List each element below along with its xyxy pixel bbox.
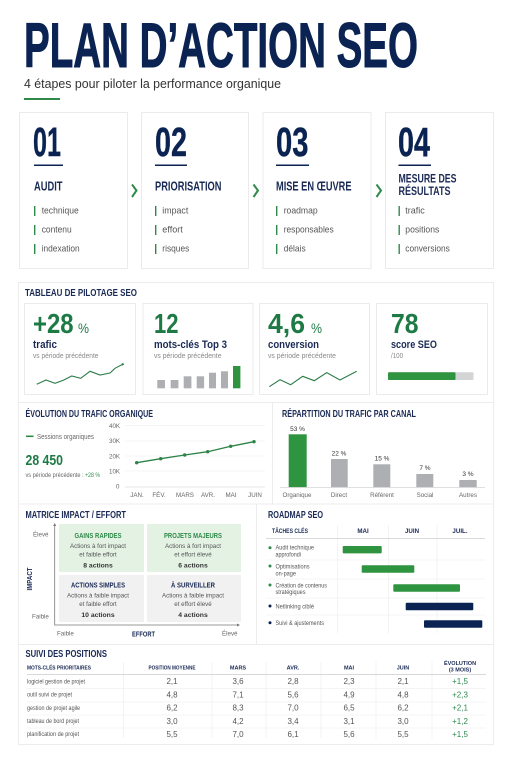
panel: step 03 mise en oeuvre: MISE EN ŒUVRE xyxy=(276,180,352,194)
panel: step 04 mesure des resultats: trafic xyxy=(405,206,425,217)
table row: outil suivi de projet: +2,3 xyxy=(452,690,468,700)
KPI: trafic: vs période précédente xyxy=(33,353,99,360)
table row: logiciel gestion de projet: logiciel gestion de projet xyxy=(27,678,85,686)
KPI: conversion: 4,6 xyxy=(268,308,305,339)
table row: outil suivi de projet: 4,8 xyxy=(166,690,178,700)
matrix axes: Faible xyxy=(57,630,74,638)
quadrant: a surveiller xyxy=(147,575,241,622)
table row: gestion de projet agile: 6,2 xyxy=(166,704,178,712)
table row: outil suivi de projet: outil suivi de projet xyxy=(27,692,72,698)
KPI: mots-cles top 3: vs période précédente xyxy=(154,353,222,360)
table row: planification de projet: 5,6 xyxy=(343,730,355,739)
panel: step 04 mesure des resultats: 04 xyxy=(398,119,430,165)
panel: step 01 audit: 01 xyxy=(33,119,61,165)
arrow: step 2 to 3 xyxy=(254,184,258,197)
bar chart: canaux: Organique xyxy=(283,492,312,499)
quadrant: gains rapides: GAINS RAPIDES xyxy=(74,531,122,540)
line chart: JUIN xyxy=(248,492,262,499)
panel: repartition du trafic par canal xyxy=(272,402,494,504)
table row: tableau de bord projet: 3,1 xyxy=(343,717,355,726)
table row: gestion de projet agile: gestion de projet agile xyxy=(27,705,80,712)
table row: logiciel gestion de projet: +1,5 xyxy=(452,677,468,686)
panel: step 02 priorisation: effort xyxy=(162,225,183,236)
table header: JUIN xyxy=(397,666,409,672)
table row: outil suivi de projet: 4,8 xyxy=(397,690,409,700)
task: optimisations on-page: on-page xyxy=(276,570,296,578)
KPI: mots-cles top 3: mots-clés Top 3 xyxy=(154,339,227,351)
panel: step 01 audit: indexation xyxy=(42,244,80,255)
quadrant: gains rapides: 8 actions xyxy=(83,562,113,570)
line chart: JAN. xyxy=(130,492,144,499)
KPI: trafic: +28 xyxy=(33,308,74,339)
table header: MOTS-CLÉS PRIORITAIRES xyxy=(27,664,91,672)
panel: roadmap SEO xyxy=(256,504,494,644)
table row: gestion de projet agile: 8,3 xyxy=(232,704,244,712)
table grid xyxy=(27,662,486,738)
table row: planification de projet: planification de projet xyxy=(27,731,79,738)
table row: planification de projet xyxy=(27,730,468,739)
matrix axes: Élevé xyxy=(222,630,238,638)
task: creation de contenus: stratégiques xyxy=(276,589,306,596)
bar chart: canaux: Social xyxy=(417,492,433,499)
table header: MAI xyxy=(344,666,355,672)
matrix axes: Faible xyxy=(32,614,49,620)
subtitle: 4 étapes pour piloter la performance organique xyxy=(24,76,281,91)
line chart: 20K xyxy=(109,454,121,460)
heading: repartition: RÉPARTITION DU TRAFIC PAR CANAL xyxy=(282,407,416,420)
line chart: MAI xyxy=(225,492,237,499)
table header xyxy=(27,659,476,674)
panel: step 03 mise en oeuvre: délais xyxy=(284,244,306,255)
KPI: conversion: vs période précédente xyxy=(268,353,336,360)
line chart: FÉV. xyxy=(152,492,166,499)
bar chart: canaux: Référent xyxy=(370,492,394,499)
KPI: score SEO: 78 xyxy=(391,308,418,339)
line chart xyxy=(109,423,265,499)
task: audit technique xyxy=(268,544,382,558)
table row: gestion de projet agile xyxy=(27,704,468,712)
table row: tableau de bord projet: tableau de bord projet xyxy=(27,718,79,725)
heading: suivi: SUIVI DES POSITIONS xyxy=(26,648,107,660)
quadrant: a surveiller: et effort élevé xyxy=(174,601,212,608)
panel: step 04 mesure des resultats: RÉSULTATS xyxy=(398,183,450,198)
KPI: score SEO: score SEO xyxy=(391,339,437,351)
line chart: 0 xyxy=(116,484,120,490)
panel: step 01 audit xyxy=(20,112,128,268)
quadrant: gains rapides: et faible effort xyxy=(79,552,117,558)
table row: tableau de bord projet: 3,0 xyxy=(397,717,409,726)
table header: POSITION MOYENNE xyxy=(148,666,196,672)
panel: matrice impact effort xyxy=(18,504,256,644)
KPI: trafic: % xyxy=(78,320,89,336)
table row: gestion de projet agile: 6,2 xyxy=(397,704,409,712)
panel: step 04 mesure des resultats: conversions xyxy=(405,244,450,255)
table row: planification de projet: 5,5 xyxy=(166,730,178,739)
table row: logiciel gestion de projet xyxy=(27,677,468,686)
task: suivi et ajustements xyxy=(268,620,482,628)
arrow: step 3 to 4 xyxy=(376,184,381,197)
heading: roadmap: ROADMAP SEO xyxy=(268,509,323,521)
heading: evolution: ÉVOLUTION DU TRAFIC ORGANIQUE xyxy=(26,407,153,420)
KPI: trafic xyxy=(24,304,136,394)
quadrant: projets majeurs: PROJETS MAJEURS xyxy=(164,531,222,540)
table header: MARS xyxy=(230,666,246,672)
KPI: mots-cles top 3 xyxy=(143,304,253,394)
KPI: conversion: % xyxy=(311,320,322,336)
quadrant: a surveiller: Actions à faible impact xyxy=(162,592,224,600)
gantt grid and header: TÂCHES CLÉS xyxy=(272,527,308,535)
bar chart: canaux: 7 % xyxy=(419,465,431,472)
task: optimisations on-page xyxy=(268,564,414,578)
panel: step 03 mise en oeuvre: 03 xyxy=(276,119,308,165)
bar chart: canaux: 3 % xyxy=(462,471,474,478)
key figure: vs période précédente : xyxy=(26,472,84,479)
table row: tableau de bord projet: +1,2 xyxy=(452,717,468,726)
quadrant: gains rapides xyxy=(59,524,144,572)
key figure: 28 450 xyxy=(26,453,63,469)
KPI: score SEO xyxy=(376,304,488,394)
KPI: conversion xyxy=(260,304,370,394)
table row: outil suivi de projet: 7,1 xyxy=(232,690,244,700)
panel: step 02 priorisation: risques xyxy=(162,244,190,255)
matrix axes xyxy=(25,523,240,638)
arrow: step 1 to 2 xyxy=(132,184,136,197)
table header: AVR. xyxy=(287,666,300,672)
table row: gestion de projet agile: +2,1 xyxy=(452,704,468,712)
panel: step 02 priorisation: impact xyxy=(162,206,189,217)
heading: matrice: MATRICE IMPACT / EFFORT xyxy=(26,509,126,521)
panel: step 01 audit: technique xyxy=(42,206,79,217)
line chart: MARS xyxy=(176,492,194,499)
task: creation de contenus xyxy=(268,582,460,596)
panel: evolution du trafic organique xyxy=(18,402,272,504)
table row: outil suivi de projet xyxy=(27,690,468,700)
table row: tableau de bord projet: 3,4 xyxy=(287,717,299,726)
bar chart: canaux: Direct xyxy=(331,492,347,499)
matrix axes: EFFORT xyxy=(132,630,155,638)
line chart: 40K xyxy=(109,423,121,430)
KPI: score SEO: /100 xyxy=(391,353,403,360)
quadrant: gains rapides: Actions à fort impact xyxy=(70,543,126,550)
gantt grid and header xyxy=(266,525,485,633)
table row: logiciel gestion de projet: 2,1 xyxy=(166,677,178,686)
line chart: 30K xyxy=(109,438,121,445)
task: optimisations on-page: Optimisations xyxy=(276,564,310,570)
panel: step 03 mise en oeuvre: roadmap xyxy=(284,206,318,217)
table header: (3 MOIS) xyxy=(449,668,471,674)
panel: step 02 priorisation: 02 xyxy=(155,119,187,165)
bar chart: canaux: 53 % xyxy=(290,426,305,433)
KPI: conversion: conversion xyxy=(268,339,319,351)
line chart: AVR. xyxy=(201,492,215,499)
task: audit technique: Audit technique xyxy=(276,544,314,552)
panel: step 04 mesure des resultats xyxy=(386,112,494,268)
table row: tableau de bord projet: 4,2 xyxy=(232,717,244,726)
quadrant: projets majeurs: et effort élevé xyxy=(174,552,212,558)
quadrant: actions simples: ACTIONS SIMPLES xyxy=(71,580,125,590)
bar chart: canaux: Autres xyxy=(459,492,477,499)
quadrant: actions simples: et faible effort xyxy=(79,601,117,608)
table row: planification de projet: 6,1 xyxy=(287,730,299,739)
table header: ÉVOLUTION xyxy=(444,659,476,667)
KPI: mots-cles top 3: 12 xyxy=(154,308,178,339)
key figure: +28 % xyxy=(85,472,100,479)
table row: planification de projet: 7,0 xyxy=(232,730,244,739)
bar chart: canaux: 15 % xyxy=(375,456,390,462)
key figure xyxy=(26,453,100,479)
panel: step 02 priorisation xyxy=(142,112,248,268)
panel: step 03 mise en oeuvre: responsables xyxy=(284,225,334,236)
panel: suivi des positions xyxy=(18,644,494,744)
quadrant: projets majeurs: 6 actions xyxy=(178,562,208,570)
bar chart: canaux: 22 % xyxy=(332,450,347,458)
panel: step 01 audit: AUDIT xyxy=(34,180,63,194)
KPI: trafic: trafic xyxy=(33,339,57,351)
quadrant: actions simples: Actions à faible impact xyxy=(67,592,129,600)
line chart: 10K xyxy=(109,468,121,476)
task: netlinking cible xyxy=(268,603,473,610)
task: suivi et ajustements: Suivi & ajustements xyxy=(276,620,325,627)
task: netlinking cible: Netlinking ciblé xyxy=(276,604,314,610)
table row: planification de projet: +1,5 xyxy=(452,730,468,739)
table row: planification de projet: 5,5 xyxy=(397,730,409,739)
quadrant: projets majeurs: Actions à fort impact xyxy=(165,543,221,550)
matrix axes: IMPACT xyxy=(25,567,34,590)
table row: logiciel gestion de projet: 2,3 xyxy=(343,677,355,686)
table row: logiciel gestion de projet: 3,6 xyxy=(232,677,244,686)
table row: logiciel gestion de projet: 2,1 xyxy=(397,677,409,686)
panel: step 02 priorisation: PRIORISATION xyxy=(155,180,222,194)
table row: gestion de projet agile: 7,0 xyxy=(287,704,299,712)
panel: dashboard xyxy=(18,282,494,402)
title accent rule xyxy=(24,98,60,100)
quadrant: actions simples xyxy=(59,575,144,622)
panel: step 04 mesure des resultats: positions xyxy=(405,225,440,236)
task: creation de contenus: Création de contenus xyxy=(276,582,328,590)
quadrant: a surveiller: 4 actions xyxy=(178,612,208,619)
quadrant: actions simples: 10 actions xyxy=(81,612,115,619)
table row: tableau de bord projet: 3,0 xyxy=(166,717,178,726)
table row: outil suivi de projet: 4,9 xyxy=(343,690,355,700)
bar chart: canaux xyxy=(280,426,485,499)
panel: step 01 audit: contenu xyxy=(42,225,72,236)
matrix axes: Élevé xyxy=(33,532,49,538)
panel: step 04 mesure des resultats: MESURE DES xyxy=(398,172,456,186)
heading: tableau de pilotage: TABLEAU DE PILOTAGE SEO xyxy=(25,287,137,299)
table row: gestion de projet agile: 6,5 xyxy=(343,704,355,712)
panel: step 03 mise en oeuvre xyxy=(263,112,371,268)
task: audit technique: approfondi xyxy=(276,552,301,558)
gantt grid and header: JUIL. xyxy=(452,528,468,535)
quadrant: projets majeurs xyxy=(147,524,241,572)
quadrant: a surveiller: À SURVEILLER xyxy=(171,580,215,590)
gantt grid and header: JUIN xyxy=(405,528,420,535)
gantt grid and header: MAI xyxy=(357,528,369,535)
table row: logiciel gestion de projet: 2,8 xyxy=(287,677,299,686)
table row: tableau de bord projet xyxy=(27,717,468,726)
table row: outil suivi de projet: 5,6 xyxy=(287,690,299,700)
legend: Sessions organiques xyxy=(37,434,94,441)
